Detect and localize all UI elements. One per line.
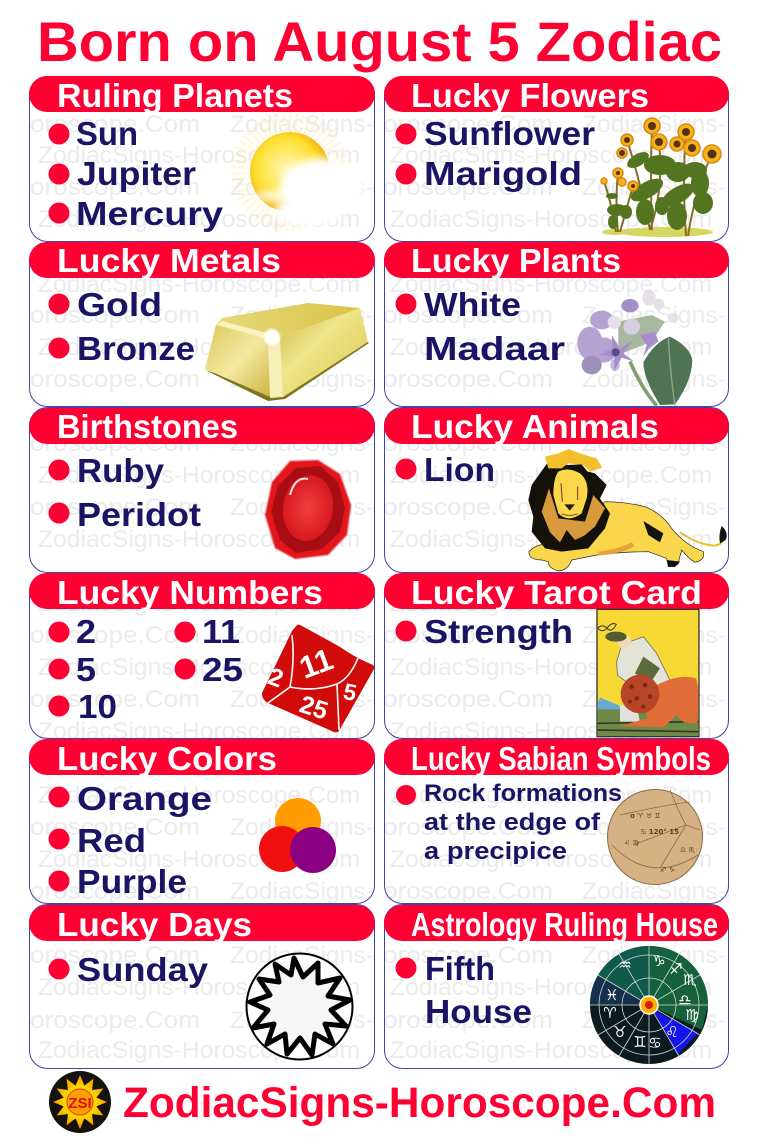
text: ZodiacSigns-Horoscope.Com	[38, 206, 360, 233]
text: ZodiacSigns-Horoscope.Com	[38, 718, 360, 745]
icon: parchment chart: o ♈ ♉ ♊	[630, 812, 661, 820]
text: rock formations: at the edge of	[424, 809, 601, 836]
text: ZodiacSigns-Horoscope.Com	[230, 1007, 552, 1034]
panel: lucky colors	[29, 739, 375, 904]
text: oroscope.Com	[30, 622, 200, 649]
icon: white madaar plant	[577, 290, 692, 406]
text: ZodiacSigns-Horoscope.Com	[390, 654, 712, 681]
text: oroscope.Com	[30, 814, 200, 841]
icon: strength tarot card	[597, 609, 699, 737]
icon: ruby gem	[265, 460, 351, 559]
icon: parchment chart: ♎ ♏	[680, 846, 696, 854]
icon: zodiac wheel: ♑	[652, 952, 666, 970]
text: ZodiacSigns-Horoscope.Com	[38, 590, 360, 617]
text: ZodiacSigns-Horoscope.Com	[38, 1037, 360, 1064]
panel: ruling planets	[29, 76, 375, 242]
text: ZodiacSigns-Horoscope.Com	[390, 590, 712, 617]
footer website name: ZodiacSigns-Horoscope.Com	[123, 1079, 716, 1127]
icon: sun symbol in circle	[246, 954, 352, 1060]
icon: red ten-sided die: 25	[296, 690, 331, 726]
icon: zodiac wheel: ♐	[669, 960, 683, 978]
panel: lucky metals	[29, 242, 375, 406]
list: planets: Mercury	[76, 195, 224, 232]
list: plants	[396, 286, 565, 367]
text: rock formations	[396, 780, 622, 865]
list: plants: White	[424, 286, 521, 323]
list: house: Fifth	[425, 950, 495, 987]
icon: zodiac wheel: ♎	[678, 991, 692, 1009]
text: ZodiacSigns-Horoscope.Com	[38, 654, 360, 681]
text: oroscope.Com	[30, 430, 200, 457]
text: oroscope.Com	[383, 686, 553, 713]
text: ZodiacSigns-Horoscope.Com	[38, 974, 360, 1001]
list: animals: Lion	[424, 451, 495, 488]
list: metals	[48, 286, 195, 367]
text: oroscope.Com	[30, 111, 200, 138]
panel: lucky flowers	[384, 76, 729, 242]
text: ZodiacSigns-Horoscope.Com	[390, 142, 712, 169]
icon: zodiac wheel: ♌	[665, 1023, 679, 1041]
heading: lucky numbers: Lucky Numbers	[57, 574, 323, 611]
text: ZodiacSigns-Horoscope.Com	[230, 814, 552, 841]
text: ZodiacSigns-Horoscope.Com	[230, 494, 552, 521]
text: ZodiacSigns-Horoscope.Com	[230, 430, 552, 457]
panel: lucky animals	[384, 408, 729, 572]
list: tarot: Strength	[424, 613, 573, 650]
icon: zodiac wheel: ♒	[618, 956, 632, 974]
heading: lucky flowers: Lucky Flowers	[411, 77, 649, 114]
icon: zodiac wheel: ♏	[683, 971, 697, 989]
text: ZodiacSigns-Horoscope.Com	[390, 271, 712, 298]
text: ZodiacSigns-Horoscope.Com	[390, 526, 712, 553]
icon: zodiac wheel: ♍	[685, 1006, 699, 1024]
heading: ruling planets: Ruling Planets	[57, 77, 293, 114]
text: oroscope.Com	[383, 622, 553, 649]
list: flowers	[396, 115, 595, 192]
list: colors: Orange	[77, 780, 212, 817]
text: oroscope.Com	[383, 430, 553, 457]
text: oroscope.Com	[383, 494, 553, 521]
icon: red ten-sided die: 2	[264, 662, 287, 693]
text: ZodiacSigns-Horoscope.Com	[38, 526, 360, 553]
list: house: House	[425, 993, 532, 1030]
panel: lucky tarot card	[384, 573, 729, 738]
text: rock formations: a precipice	[424, 838, 567, 865]
list: colors	[48, 780, 212, 900]
icon: red ten-sided die: 11	[295, 641, 338, 686]
text: oroscope.Com	[383, 878, 553, 905]
icon: zodiac wheel: ♋	[648, 1034, 662, 1052]
text: ZodiacSigns-Horoscope.Com	[390, 334, 712, 361]
text: ZodiacSigns-Horoscope.Com	[38, 334, 360, 361]
text: ZodiacSigns-Horoscope.Com	[230, 686, 552, 713]
text: oroscope.Com	[30, 366, 200, 393]
footer logo	[49, 1071, 111, 1133]
text: ZodiacSigns-Horoscope.Com	[38, 142, 360, 169]
panel: birthstones	[29, 408, 375, 572]
icon: sunflowers	[601, 118, 721, 237]
icon: three color circles	[259, 798, 336, 873]
list: planets: Jupiter	[77, 155, 196, 192]
heading: lucky metals: Lucky Metals	[57, 242, 281, 279]
text: oroscope.Com	[383, 111, 553, 138]
icon: lion	[528, 449, 727, 571]
list: numbers: 25	[202, 651, 243, 688]
text: oroscope.Com	[30, 1007, 200, 1034]
heading: lucky plants: Lucky Plants	[411, 242, 621, 279]
text: rock formations: Rock formations	[424, 780, 622, 807]
text: ZodiacSigns-Horoscope.Com	[38, 271, 360, 298]
text: oroscope.Com	[383, 942, 553, 969]
text: oroscope.Com	[383, 174, 553, 201]
icon: zodiac wheel	[590, 946, 708, 1064]
list: stones: Ruby	[77, 452, 165, 489]
icon: red ten-sided die: 5	[341, 678, 359, 706]
text: oroscope.Com	[30, 878, 200, 905]
heading: birthstones: Birthstones	[57, 408, 238, 445]
text: oroscope.Com	[383, 1007, 553, 1034]
heading: lucky animals: Lucky Animals	[411, 408, 659, 445]
icon: red ten-sided die	[262, 625, 374, 732]
list: days: Sunday	[77, 951, 209, 988]
list: house	[396, 950, 532, 1030]
panel: lucky days	[29, 904, 375, 1068]
icon: zodiac wheel: ♊	[633, 1033, 647, 1051]
text: oroscope.Com	[30, 686, 200, 713]
list: flowers: Marigold	[424, 155, 582, 192]
text: oroscope.Com	[30, 302, 200, 329]
list: plants: Madaar	[424, 330, 565, 367]
icon: gold bar	[205, 303, 369, 401]
text: ZodiacSigns-Horoscope.Com	[230, 111, 552, 138]
heading: lucky days: Lucky Days	[57, 906, 252, 943]
icon: zodiac wheel: ♈	[603, 1004, 617, 1022]
icon: parchment chart: ♌ ♍	[624, 839, 640, 847]
panel: lucky sabian symbols	[384, 739, 729, 904]
panel: astrology ruling house	[384, 904, 729, 1068]
text: oroscope.Com	[383, 302, 553, 329]
list: colors: Purple	[77, 863, 187, 900]
text: ZodiacSigns-Horoscope.Com	[390, 462, 712, 489]
icon: parchment chart	[608, 790, 702, 884]
text: ZodiacSigns-Horoscope.Com	[390, 974, 712, 1001]
text: ZodiacSigns-Horoscope.Com	[38, 846, 360, 873]
panel: lucky plants	[384, 242, 729, 406]
panel: lucky numbers	[29, 573, 375, 738]
list: numbers	[48, 613, 243, 725]
text: ZodiacSigns-Horoscope.Com	[230, 302, 552, 329]
list: flowers: Sunflower	[424, 115, 595, 152]
text: oroscope.Com	[383, 366, 553, 393]
list: numbers: 5	[76, 651, 96, 688]
list: stones: Peridot	[77, 496, 201, 533]
footer logo: ZSI	[68, 1095, 92, 1112]
heading: lucky tarot card: Lucky Tarot Card	[411, 574, 702, 611]
text: ZodiacSigns-Horoscope.Com	[38, 462, 360, 489]
text: ZodiacSigns-Horoscope.Com	[230, 174, 552, 201]
text: oroscope.Com	[30, 942, 200, 969]
list: colors: Red	[77, 822, 146, 859]
text: oroscope.Com	[30, 494, 200, 521]
text: oroscope.Com	[30, 174, 200, 201]
text: oroscope.Com	[383, 814, 553, 841]
icon: zodiac wheel: ♉	[613, 1023, 627, 1041]
heading: lucky colors: Lucky Colors	[57, 740, 277, 777]
text: ZodiacSigns-Horoscope.Com	[38, 782, 360, 809]
list: metals: Bronze	[77, 330, 195, 367]
list: planets: Sun	[76, 115, 138, 152]
icon: zodiac wheel: ♓	[605, 986, 619, 1004]
icon: parchment chart: ♋ 120° 15	[640, 828, 679, 836]
text: ZodiacSigns-Horoscope.Com	[230, 878, 552, 905]
list: numbers: 10	[78, 688, 117, 725]
icon: sun behind cloud	[242, 124, 364, 226]
text: ZodiacSigns-Horoscope.Com	[390, 782, 712, 809]
text: ZodiacSigns-Horoscope.Com	[230, 942, 552, 969]
list: numbers: 11	[202, 613, 240, 650]
text: ZodiacSigns-Horoscope.Com	[230, 622, 552, 649]
text: ZodiacSigns-Horoscope.Com	[390, 1037, 712, 1064]
list: stones	[48, 452, 201, 533]
text: ZodiacSigns-Horoscope.Com	[230, 366, 552, 393]
list: metals: Gold	[77, 286, 162, 323]
text: ZodiacSigns-Horoscope.Com	[390, 718, 712, 745]
list: planets	[48, 115, 224, 232]
icon: parchment chart: ♐ ♑	[660, 866, 675, 874]
text: ZodiacSigns-Horoscope.Com	[390, 206, 712, 233]
list: numbers: 2	[76, 613, 96, 650]
title: Born on August 5 Zodiac	[37, 10, 722, 73]
text: ZodiacSigns-Horoscope.Com	[390, 846, 712, 873]
